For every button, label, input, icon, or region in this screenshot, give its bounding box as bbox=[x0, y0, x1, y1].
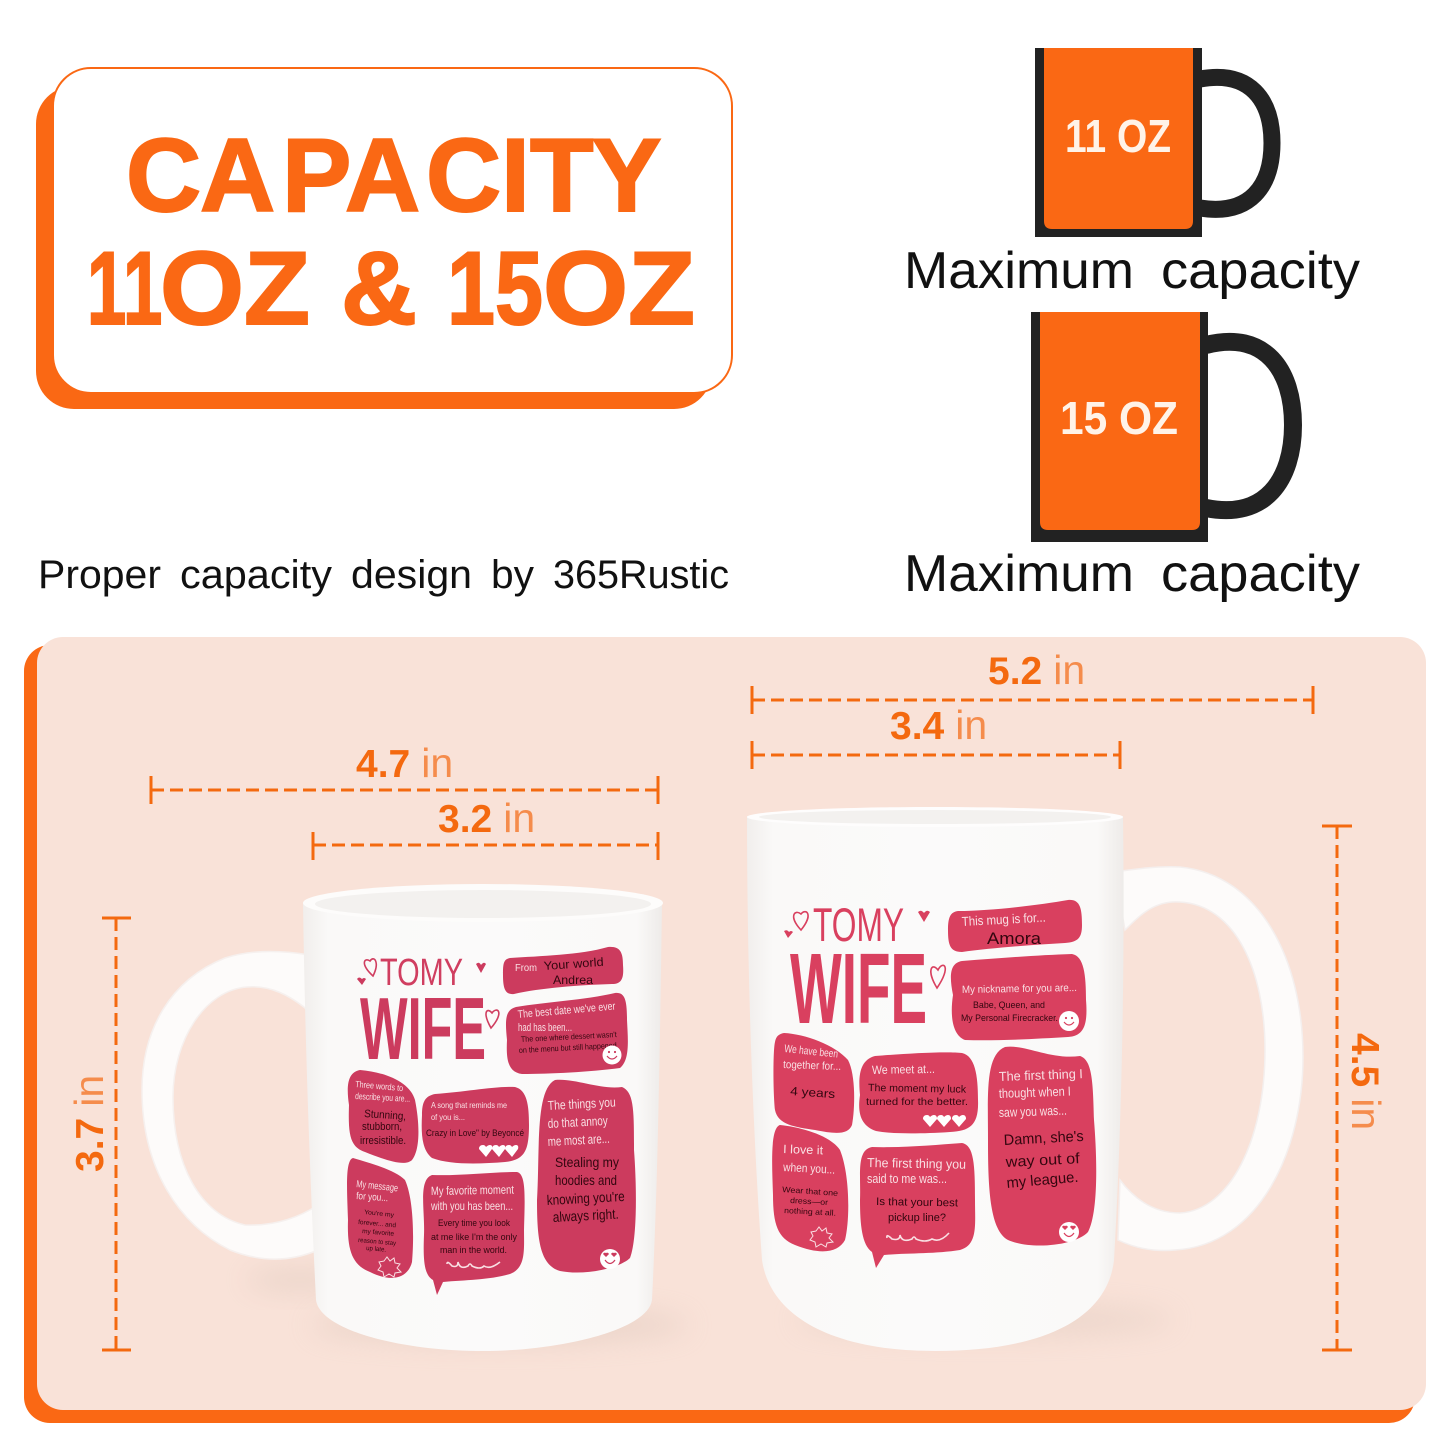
bubble: we meet at bbox=[859, 1052, 978, 1133]
bubble: first thing said: pickup line? bbox=[888, 1212, 946, 1224]
caption: proper capacity design: design bbox=[351, 553, 472, 597]
bubble: from your world: Andrea bbox=[553, 973, 593, 987]
bubble: favorite moment: at me like I'm the only bbox=[431, 1232, 517, 1243]
caption: proper capacity design: Proper bbox=[38, 553, 161, 597]
icon: heart-eyes smiley bbox=[1059, 1222, 1079, 1242]
bubble: i love it bbox=[772, 1125, 848, 1251]
bubble: favorite moment: with you has been... bbox=[430, 1199, 513, 1213]
callout: capacity title card bbox=[36, 68, 732, 409]
left mug bbox=[142, 884, 690, 1351]
print: to my wife heading, small mug bbox=[357, 952, 499, 1078]
bubble: things that annoy: hoodies and bbox=[555, 1172, 617, 1188]
bubble: my message: for you... bbox=[356, 1191, 388, 1204]
left mug handle bbox=[142, 952, 318, 1259]
title: sizes: OZ bbox=[543, 231, 695, 347]
bubble: i love it: Wear that one bbox=[782, 1185, 839, 1198]
bubble: favorite moment: Every time you look bbox=[438, 1218, 510, 1229]
bubble: my message: my favorite bbox=[362, 1228, 395, 1238]
icon: 11 oz mug: 11 OZ bbox=[1065, 110, 1171, 162]
bubble: we meet at: turned for the better. bbox=[866, 1096, 968, 1108]
dimension: 3.4 in diameter bbox=[752, 702, 1120, 769]
label: maximum capacity 11 oz: capacity bbox=[1161, 242, 1360, 300]
bubble: we meet at: We meet at... bbox=[872, 1062, 935, 1077]
bubble: first thing thought: Damn, she's bbox=[1003, 1128, 1084, 1149]
icon: three hearts bbox=[479, 1145, 518, 1157]
title: sizes: 11 bbox=[87, 229, 162, 346]
bubble: first thing thought: The first thing I bbox=[999, 1066, 1083, 1084]
bubble: nickname: My Personal Firecracker. bbox=[961, 1013, 1058, 1024]
bubble: first thing said: Is that your best bbox=[876, 1196, 958, 1209]
bubble: three words: Three words to bbox=[355, 1079, 404, 1093]
bubble: things that annoy: Stealing my bbox=[555, 1154, 619, 1170]
bubble: we meet at: The moment my luck bbox=[868, 1082, 967, 1096]
bubble: song: of you is... bbox=[431, 1112, 465, 1122]
bubble: first thing said: The first thing you bbox=[867, 1155, 966, 1172]
bubble: i love it: when you... bbox=[782, 1160, 836, 1177]
caption: proper capacity design: by bbox=[491, 553, 534, 597]
icon: three hearts bbox=[923, 1115, 966, 1127]
bubble: things that annoy: The things you bbox=[547, 1094, 616, 1113]
bubble: first thing said: said to me was... bbox=[867, 1171, 947, 1186]
left mug rim bbox=[303, 884, 663, 922]
label: maximum capacity 15 oz bbox=[904, 545, 1360, 603]
caption: proper capacity design: 365Rustic bbox=[553, 553, 729, 597]
dimension: 5.2 in width bbox=[752, 647, 1313, 714]
icon: 15 oz mug bbox=[1031, 312, 1293, 542]
bubble: three words: stubborn, bbox=[362, 1121, 402, 1133]
bubble: things that annoy: do that annoy bbox=[547, 1113, 608, 1131]
bubble: three words: describe you are... bbox=[355, 1091, 410, 1104]
print: to my wife heading, large mug: TOMY bbox=[813, 898, 904, 951]
dimension: 3.2 in diameter: 3.2 in bbox=[438, 795, 535, 841]
title: capacity: CAPACITY bbox=[126, 118, 661, 234]
right mug handle bbox=[1115, 867, 1303, 1251]
icon: squiggle bbox=[447, 1262, 500, 1268]
icon: burst bbox=[378, 1257, 401, 1277]
bubble: things that annoy: me most are... bbox=[547, 1131, 610, 1149]
bubble: first thing thought: saw you was... bbox=[999, 1103, 1067, 1120]
bubble: together bbox=[774, 1033, 854, 1133]
bubble: best date bbox=[506, 993, 628, 1074]
dimension: 5.2 in width: 5.2 in bbox=[988, 647, 1085, 693]
bubble: first thing said bbox=[860, 1143, 975, 1268]
title: sizes bbox=[87, 229, 695, 347]
bubble: nickname: Babe, Queen, and bbox=[973, 1000, 1045, 1011]
bubble: three words: Stunning, bbox=[364, 1108, 407, 1123]
title: sizes: OZ bbox=[160, 231, 310, 347]
bubble: this mug is for: This mug is for... bbox=[961, 910, 1046, 929]
bubble: together: 4 years bbox=[790, 1084, 836, 1101]
bubble: i love it: I love it bbox=[783, 1142, 824, 1157]
print: to my wife heading, small mug: WIFE bbox=[360, 979, 486, 1078]
icon: smiley bbox=[1059, 1011, 1079, 1031]
bubble: from your world: Your world bbox=[543, 955, 604, 973]
panel: mug dimensions bbox=[24, 637, 1426, 1423]
icon: heart-eyes smiley bbox=[600, 1249, 620, 1269]
bubble: together: together for... bbox=[783, 1059, 841, 1073]
label: maximum capacity 11 oz: Maximum bbox=[904, 242, 1134, 300]
bubble: my message: forever... and bbox=[358, 1219, 397, 1229]
caption: proper capacity design bbox=[38, 553, 729, 597]
bubble: song: A song that reminds me bbox=[431, 1100, 507, 1110]
icon: squiggle bbox=[887, 1233, 949, 1241]
bubble: together: We have been bbox=[784, 1043, 839, 1061]
label: maximum capacity 11 oz bbox=[904, 242, 1360, 300]
icon: burst bbox=[810, 1227, 833, 1247]
bubble: best date: on the menu but still happened bbox=[519, 1041, 617, 1055]
bubble: things that annoy: knowing you're bbox=[546, 1188, 625, 1208]
dimension: 4.7 in width: 4.7 in bbox=[356, 740, 453, 786]
bubble: my message bbox=[347, 1158, 413, 1278]
icon: 15 oz mug: 15 OZ bbox=[1060, 392, 1178, 444]
bubble: best date: The best date we've ever bbox=[517, 1000, 616, 1021]
bubble: first thing thought bbox=[988, 1047, 1096, 1246]
dimension: 3.7 in height: 3.7in bbox=[66, 1075, 112, 1172]
bubble: i love it: nothing at all. bbox=[784, 1206, 836, 1218]
print: to my wife heading, small mug: TOMY bbox=[380, 952, 463, 994]
title: sizes: & bbox=[341, 231, 417, 347]
dimension: 4.5 in height: 4.5 in bbox=[1343, 1033, 1389, 1130]
title: sizes: 15 bbox=[447, 231, 543, 347]
dimension: 3.2 in diameter bbox=[313, 795, 658, 860]
bubble: my message: You're my bbox=[364, 1209, 395, 1219]
bubble: this mug is for bbox=[948, 900, 1082, 952]
label: maximum capacity 15 oz: Maximum bbox=[904, 545, 1134, 603]
dimension: 4.5 in height bbox=[1322, 826, 1389, 1350]
icon: 11 oz mug bbox=[1035, 48, 1272, 237]
right mug rim bbox=[747, 807, 1123, 827]
right mug body bbox=[747, 816, 1124, 1351]
bubble: favorite moment: man in the world. bbox=[440, 1245, 507, 1256]
bubble: first thing thought: thought when I bbox=[999, 1083, 1071, 1101]
bubble: nickname bbox=[951, 954, 1086, 1040]
bubble: three words bbox=[348, 1070, 418, 1163]
bubble: best date: The one where dessert wasn't bbox=[521, 1030, 618, 1044]
bubble: favorite moment bbox=[423, 1172, 525, 1295]
bubble: first thing thought: my league. bbox=[1006, 1169, 1079, 1192]
bubble: first thing thought: way out of bbox=[1004, 1150, 1081, 1171]
caption: proper capacity design: capacity bbox=[180, 553, 332, 597]
bubble: things that annoy: always right. bbox=[552, 1206, 619, 1225]
bubble: nickname: My nickname for you are... bbox=[962, 982, 1077, 996]
dimension: 3.4 in diameter: 3.4 in bbox=[890, 702, 987, 748]
dimension: 4.7 in width bbox=[151, 740, 658, 804]
bubble: my message: up late. bbox=[366, 1245, 387, 1254]
print: to my wife heading, large mug: WIFE bbox=[790, 933, 927, 1045]
icon: smiley bbox=[602, 1046, 622, 1064]
print: to my wife heading, large mug bbox=[784, 898, 945, 1045]
bubble: song bbox=[422, 1087, 529, 1163]
bubble: my message: My message bbox=[356, 1179, 399, 1194]
bubble: this mug is for: Amora bbox=[987, 929, 1042, 948]
bubble: my message: reason to stay bbox=[358, 1237, 397, 1247]
dimension: 3.7 in height bbox=[66, 918, 131, 1350]
bubble: three words: irresistible. bbox=[360, 1135, 406, 1147]
label: maximum capacity 15 oz: capacity bbox=[1161, 545, 1360, 603]
bubble: things that annoy bbox=[537, 1080, 636, 1273]
bubble: i love it: dress—or bbox=[790, 1196, 829, 1207]
bubble: from your world bbox=[503, 947, 623, 994]
bubble: from your world: From bbox=[515, 963, 537, 974]
bubble: best date: had has been... bbox=[518, 1022, 572, 1034]
bubble: song: Crazy in Love" by Beyoncé bbox=[426, 1128, 524, 1138]
right mug bbox=[747, 807, 1303, 1351]
bubble: favorite moment: My favorite moment bbox=[431, 1183, 515, 1198]
left mug body bbox=[303, 903, 662, 1351]
